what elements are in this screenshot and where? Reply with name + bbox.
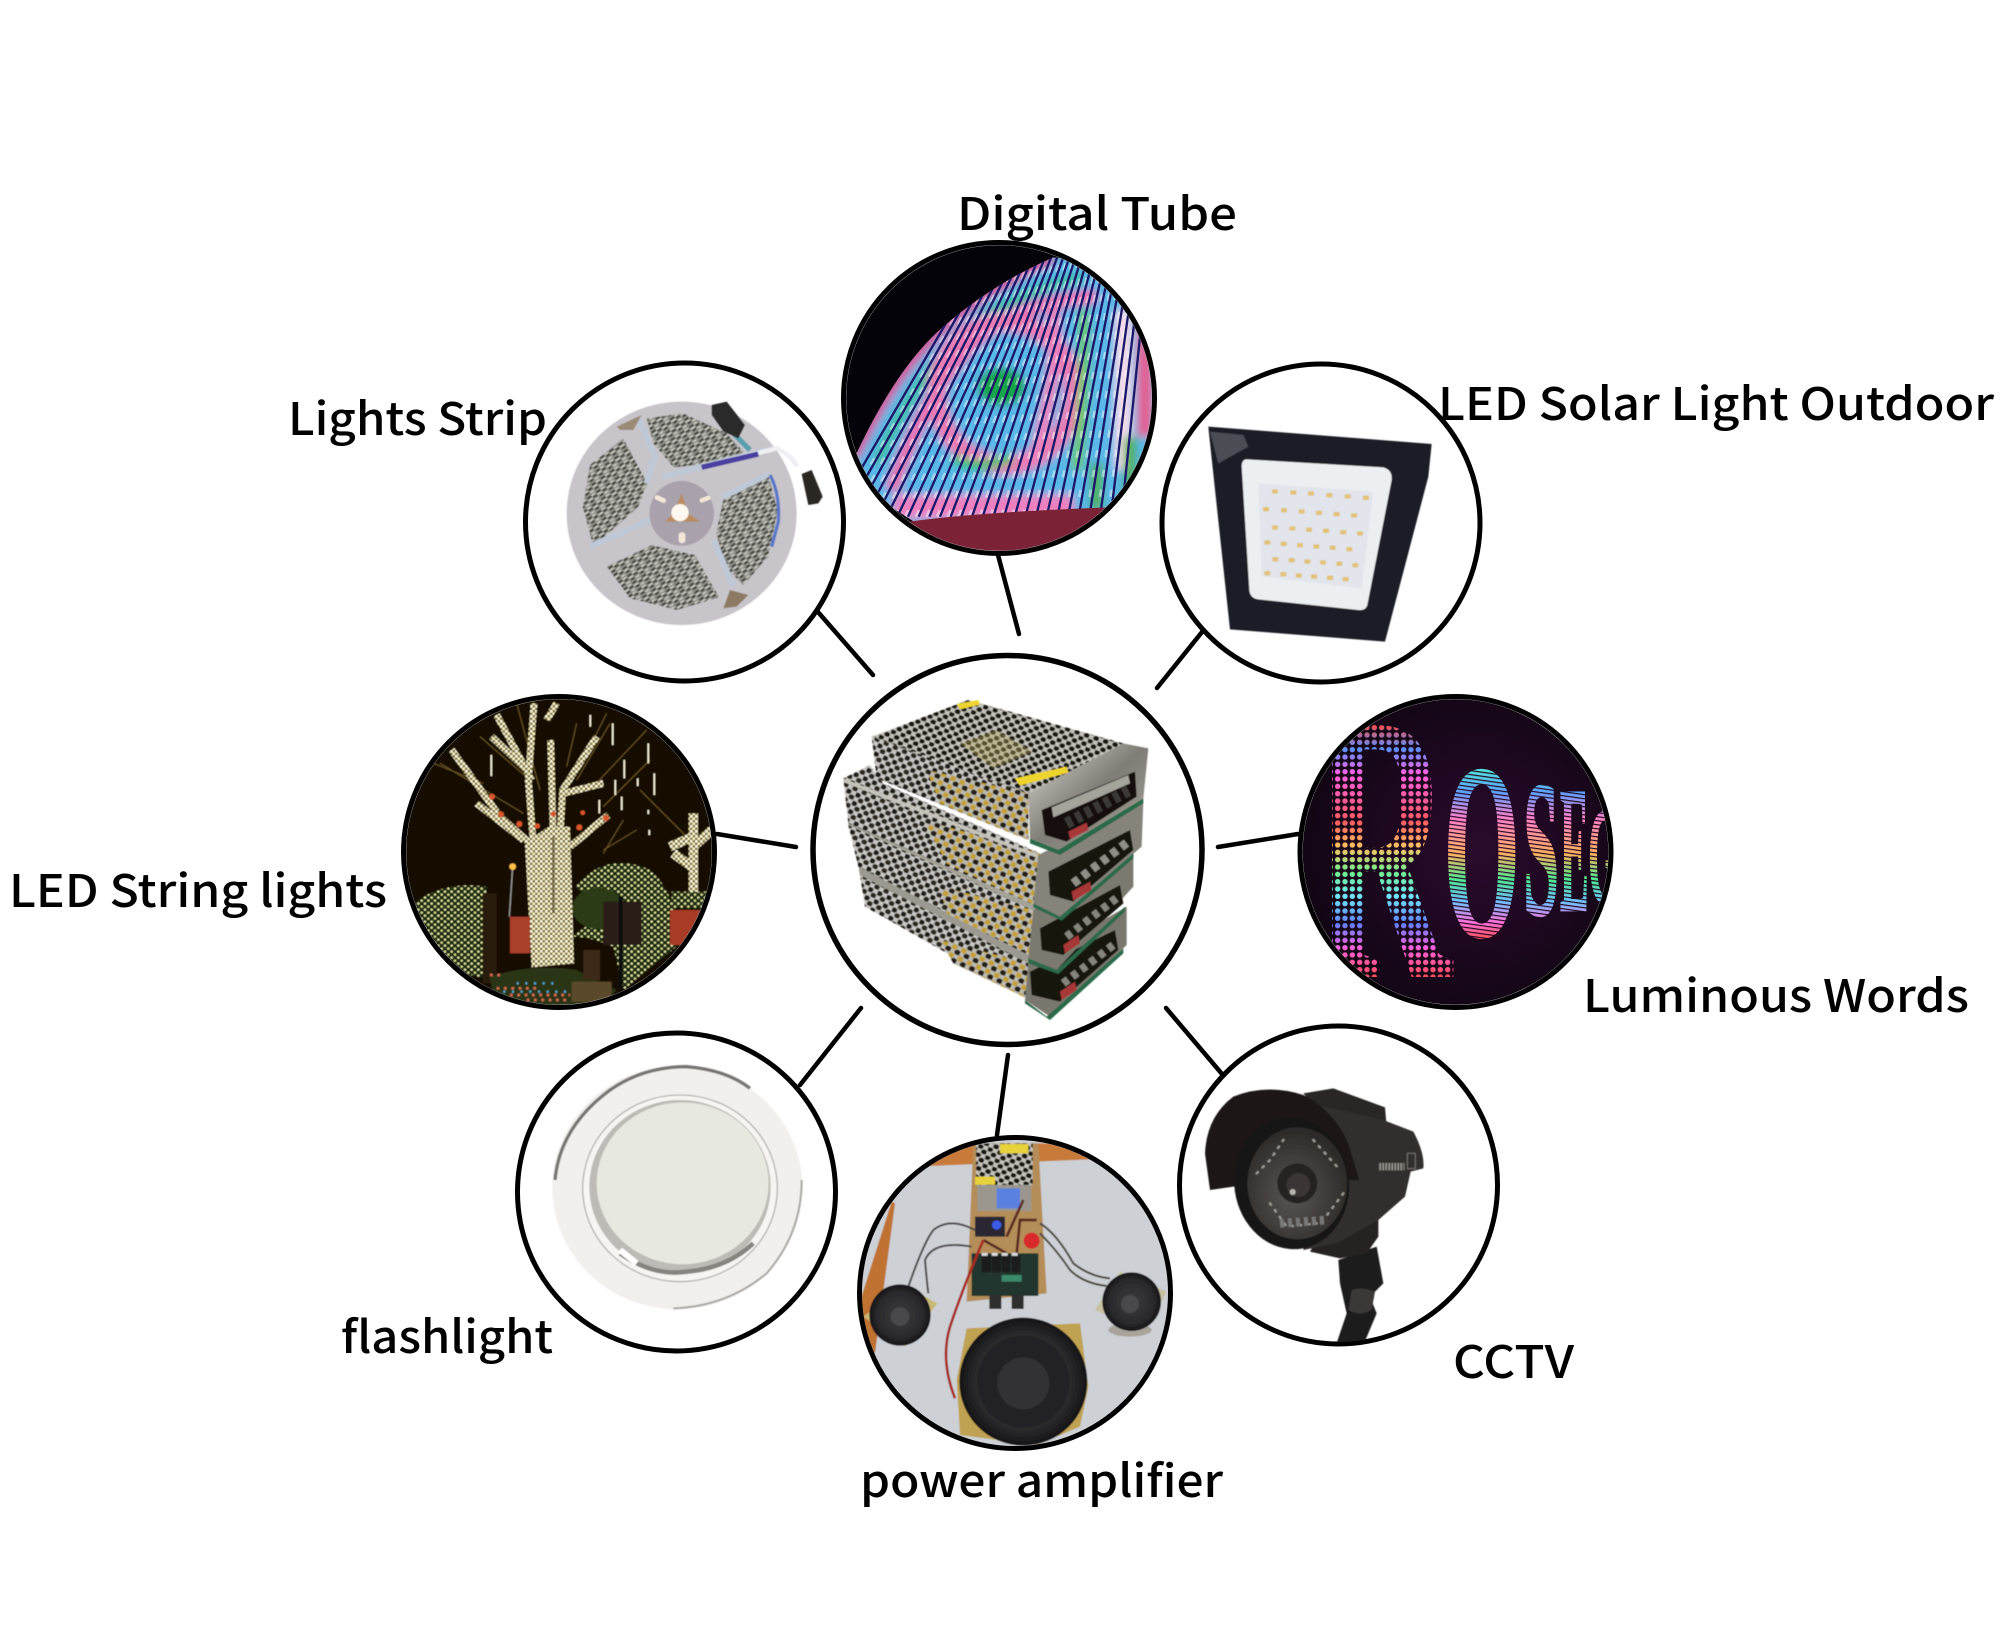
heading: flashlight: flashlight: [341, 1301, 553, 1366]
box 1: [872, 700, 1123, 793]
heading: Digital Tube: Digital Tube: [957, 178, 1237, 243]
panel: lights strip: [526, 363, 844, 681]
connector: centre to flashlight: [800, 1008, 861, 1085]
connector: centre to CCTV: [1166, 1008, 1222, 1074]
connector: centre to solar light: [1157, 632, 1202, 688]
panel: LED solar light outdoor: [1162, 364, 1480, 682]
panel: LED string lights: [401, 694, 717, 1010]
connector: centre to luminous words: [1218, 834, 1298, 847]
connector: centre to digital tube: [998, 555, 1019, 634]
panel: flashlight: [518, 1033, 836, 1351]
box 4: [860, 875, 1028, 998]
panel: luminous words: [1298, 694, 1614, 1010]
heading: CCTV: CCTV: [1453, 1326, 1574, 1391]
connector: centre to power amplifier: [997, 1055, 1008, 1135]
heading: LED String lights: LED String lights: [9, 855, 387, 920]
heading: Lights Strip: Lights Strip: [288, 383, 547, 448]
panel: centre power supply stack: [813, 656, 1202, 1044]
heading: LED Solar Light Outdoor: LED Solar Light Outdoor: [1438, 368, 1995, 433]
heading: Luminous Words: Luminous Words: [1583, 960, 1969, 1025]
panel: CCTV: [1180, 1026, 1498, 1345]
panel: digital tube: [841, 240, 1157, 556]
box 3: [848, 825, 1033, 957]
heading: power amplifier: power amplifier: [860, 1445, 1224, 1510]
box 2: [843, 765, 1040, 907]
panel: power amplifier: [857, 1135, 1173, 1451]
connector: centre to lights strip: [818, 612, 873, 675]
connector: centre to string lights: [717, 834, 796, 847]
